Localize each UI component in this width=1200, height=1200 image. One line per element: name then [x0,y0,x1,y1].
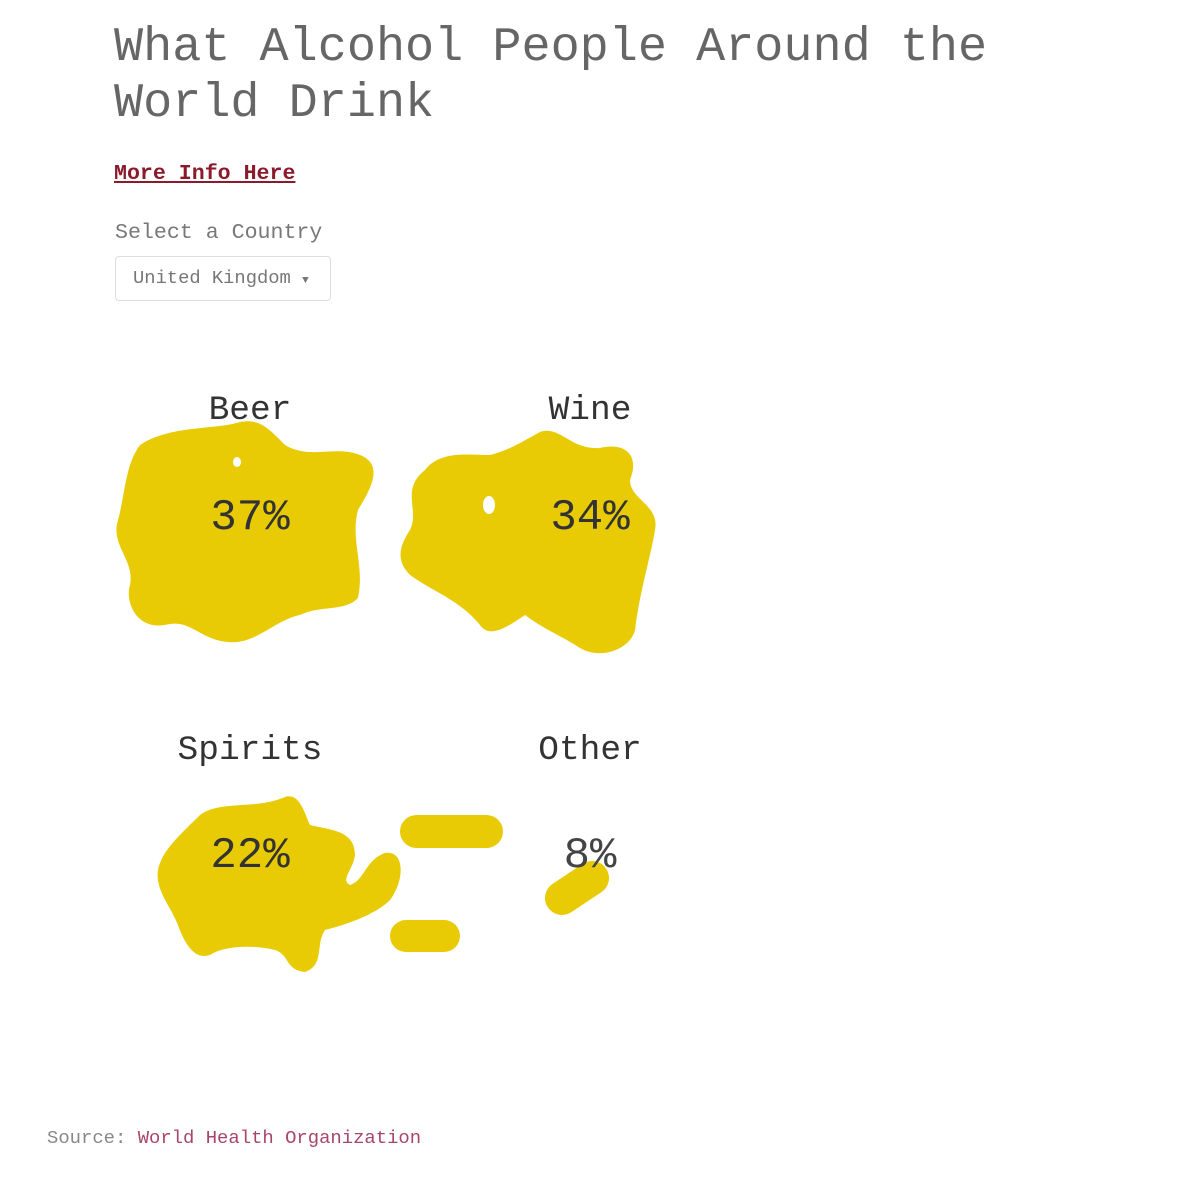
source: Source: World Health Organization [47,1127,421,1149]
dropdown label: Select a Country [115,221,322,245]
title [114,20,987,131]
title: What Alcohol People Around the [114,20,987,75]
value: wine: 34% [550,493,630,543]
blob: other [562,878,592,898]
value: beer: 37% [210,493,290,543]
title: World Drink [114,76,434,131]
link: more info: More Info Here [114,162,295,186]
dropdown [115,256,331,301]
value: spirits: 22% [210,831,290,881]
label: spirits: Spirits [178,731,322,770]
label: beer: Beer [209,391,291,430]
blob: wine [401,431,656,653]
label: other: Other [538,731,642,770]
blob: spirits [158,796,503,972]
blob: beer [116,421,374,642]
value: other: 8% [564,831,617,881]
dropdown: United Kingdom ▼ [133,267,309,289]
label: wine: Wine [549,391,631,430]
